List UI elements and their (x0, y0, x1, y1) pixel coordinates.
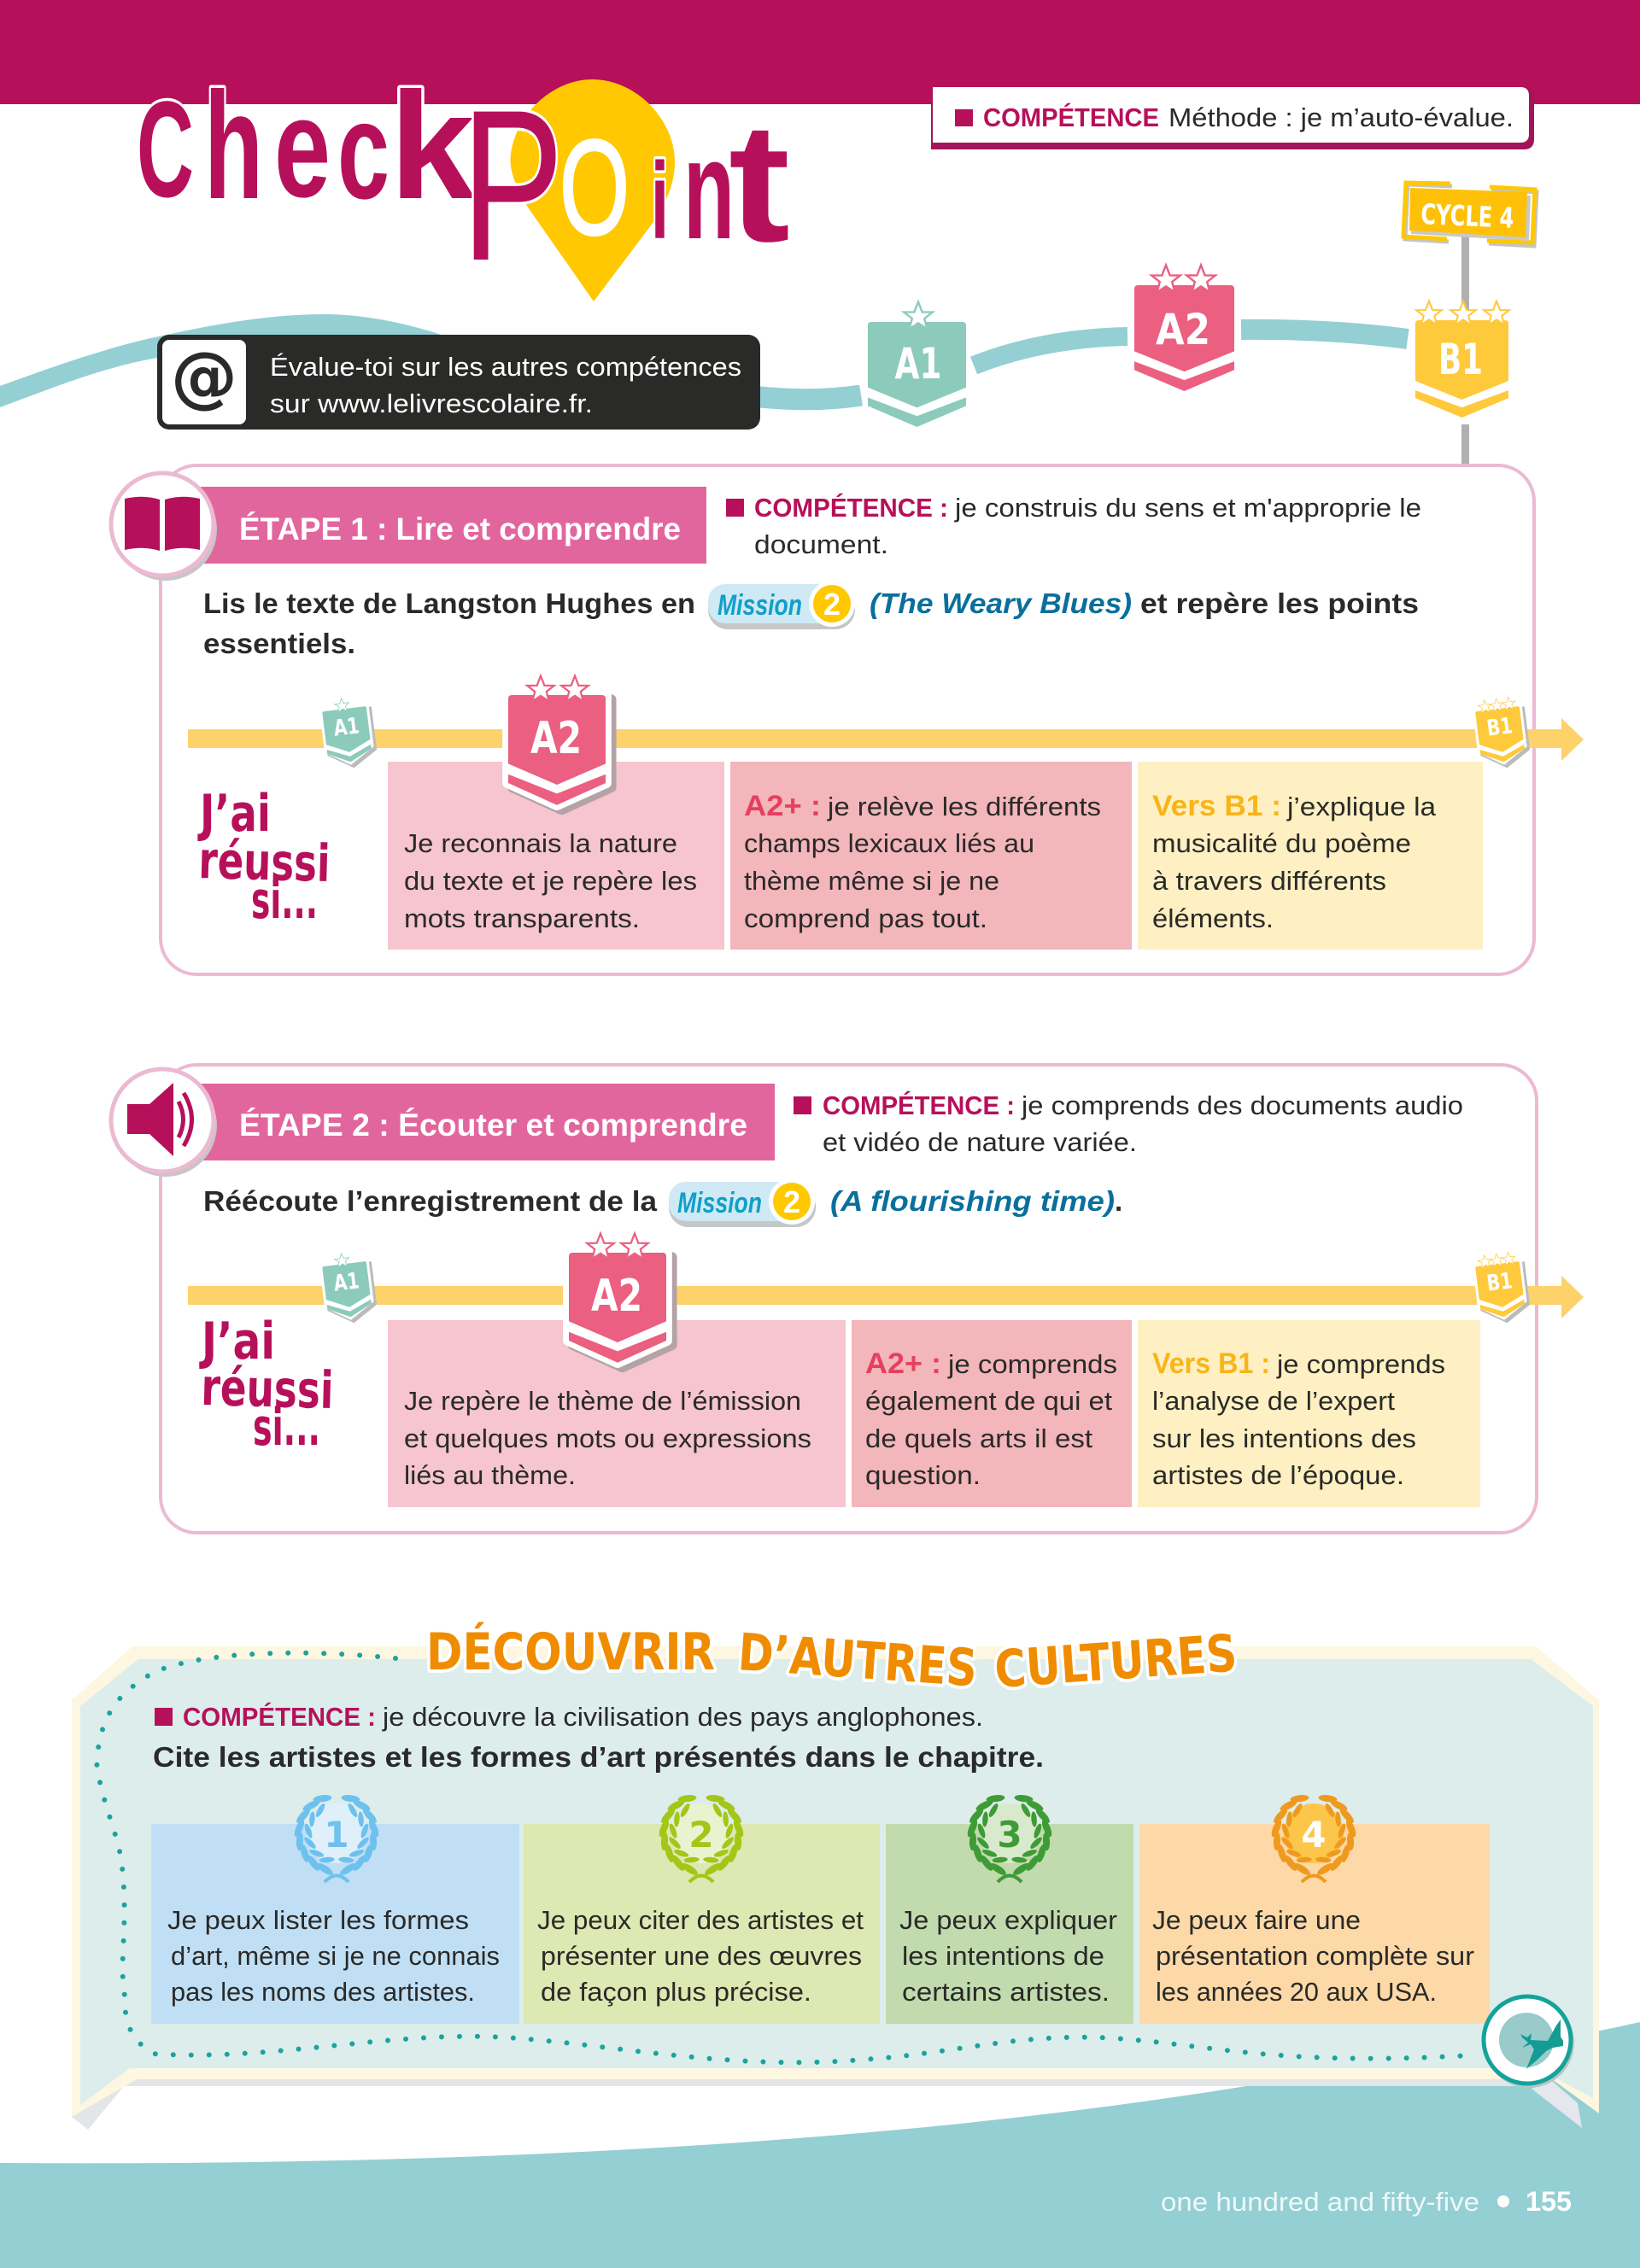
badge: small A1 (319, 1250, 378, 1326)
level box 2: présenter une des œuvres (541, 1941, 862, 1971)
box: towards B1: j’explique la (1286, 792, 1437, 821)
j'ai reussi si: si... (253, 1398, 320, 1458)
box: towards B1: à travers différents (1152, 866, 1386, 896)
heading: etape 1: ÉTAPE 1 : Lire et comprendre (239, 511, 681, 547)
title: decouvrir d'autres cultures (426, 1621, 1239, 1700)
instruction (203, 581, 1419, 659)
checkpoint logo (137, 61, 790, 306)
logo letters (137, 61, 790, 306)
badge: small B1: B1 (1485, 1268, 1514, 1297)
icon: wreath 4: 4 (1301, 1814, 1327, 1856)
instruction: Lis le texte de Langston Hughes en (203, 587, 695, 619)
icon: wreath 3: 3 (997, 1814, 1022, 1856)
callout: evaluate online: sur www.lelivrescolaire.fr. (270, 389, 593, 418)
competence box: methode (931, 87, 1534, 149)
level box 4: les années 20 aux USA. (1156, 1977, 1437, 2007)
logo letters: O (559, 113, 630, 263)
box: level A2 plus: question. (865, 1460, 981, 1490)
title: decouvrir d'autres cultures: DÉCOUVRIR (426, 1621, 715, 1682)
heading: etape 2 (201, 1084, 775, 1160)
box: towards B1: je comprends (1276, 1349, 1445, 1379)
icon: wreath 1 (292, 1794, 381, 1882)
level box 1 (151, 1824, 519, 2024)
badge: B1 level: B1 (1438, 335, 1483, 384)
icon: yellow map pin (511, 79, 675, 301)
logo letters: i (651, 140, 669, 261)
box: towards B1: Vers B1 : (1152, 790, 1281, 822)
box: level A2 plus: thème même si je ne (744, 866, 999, 896)
box: level A2 (388, 1320, 846, 1507)
badge: small A1: A1 (332, 713, 360, 742)
box: level A2: Je repère le thème de l’émission (404, 1386, 801, 1416)
badge: big A2: A2 (530, 713, 582, 764)
icon: at sign: @ (171, 339, 237, 416)
icon: wreath 1: 1 (324, 1814, 349, 1856)
badge: A2 level (1134, 265, 1234, 391)
icon: wreath 2: 2 (688, 1814, 714, 1856)
competence box: methode: Méthode : je m’auto-évalue. (1168, 102, 1514, 132)
level box 3: Je peux expliquer (899, 1905, 1117, 1935)
instruction (203, 1178, 1122, 1227)
instruction: (The Weary Blues) (870, 587, 1132, 619)
level box 2: de façon plus précise. (541, 1977, 811, 2007)
footer page number: 155 (1526, 2186, 1572, 2217)
box: towards B1: éléments. (1152, 903, 1274, 933)
j'ai reussi si: réussi (198, 831, 331, 894)
competence text: je découvre la civilisation des pays anglophones. (382, 1702, 983, 1732)
j'ai reussi si: J’ai (197, 784, 271, 844)
box: level A2: mots transparents. (404, 903, 640, 933)
badge: small B1: B1 (1485, 713, 1514, 742)
competence text (726, 493, 1421, 559)
box: level A2: et quelques mots ou expressions (404, 1423, 811, 1453)
box: level A2 plus: je comprends (947, 1349, 1117, 1379)
level box 4: présentation complète sur (1156, 1941, 1474, 1971)
mission 2 tag (669, 1178, 816, 1227)
badge: big A2: A2 (591, 1271, 642, 1322)
level box 3 (886, 1824, 1133, 2024)
j'ai reussi si: si... (251, 871, 318, 931)
level box 4 (1139, 1824, 1490, 2024)
badge: A1 level (868, 301, 966, 427)
logo letters: k (390, 61, 476, 231)
box: level A2 plus: champs lexicaux liés au (744, 828, 1034, 858)
panel: etape 1 (111, 465, 1584, 974)
pole (1461, 231, 1469, 465)
instruction: Réécoute l’enregistrement de la (203, 1185, 658, 1217)
progress arrow (188, 718, 1584, 761)
box: level A2 plus (852, 1320, 1132, 1507)
competence box: methode: COMPÉTENCE (983, 102, 1159, 132)
box: level A2 plus: de quels arts il est (865, 1423, 1092, 1453)
j'ai reussi si (199, 1312, 334, 1458)
box: level A2 plus: comprend pas tout. (744, 903, 987, 933)
callout: evaluate online: Évalue-toi sur les autres compétences (270, 352, 741, 382)
box: level A2 (388, 762, 724, 950)
competence text: COMPÉTENCE : (754, 493, 948, 523)
icon: book (111, 473, 217, 581)
callout: evaluate online (157, 335, 760, 430)
instruction: et repère les points (1140, 587, 1419, 619)
box: level A2 plus: également de qui et (865, 1386, 1112, 1416)
badge: B1 level (1415, 301, 1509, 418)
icon: wreath 3 (965, 1794, 1054, 1882)
level box 1: Je peux lister les formes (167, 1905, 469, 1935)
box: level A2 plus: A2+ : (744, 790, 821, 822)
badge: small B1 (1472, 695, 1532, 771)
logo letters: t (729, 88, 790, 277)
logo letters: e (274, 69, 331, 227)
bottom teal wave (0, 2022, 1640, 2268)
box: towards B1 (1138, 1320, 1480, 1507)
badge: A1 level: A1 (895, 339, 941, 389)
teal wave path (0, 314, 1408, 427)
progress arrow (188, 1276, 1584, 1318)
badge: big A2 (569, 1233, 671, 1367)
badge: small A1: A1 (332, 1268, 360, 1297)
competence text: COMPÉTENCE : (823, 1090, 1015, 1120)
competence text (794, 1090, 1463, 1157)
icon: speaker (111, 1069, 217, 1177)
box: towards B1: artistes de l’époque. (1152, 1460, 1404, 1490)
icon: plane (1484, 1996, 1574, 2088)
heading: etape 1 (201, 487, 706, 564)
badge: big A2 (508, 676, 611, 810)
box: level A2 plus: je relève les différents (827, 792, 1101, 821)
badge: small B1 (1472, 1250, 1532, 1326)
cycle 4 sign: CYCLE 4 (1420, 197, 1514, 235)
competence text: et vidéo de nature variée. (823, 1127, 1137, 1157)
logo letters: h (204, 61, 263, 231)
instruction: (A flourishing time) (830, 1185, 1115, 1217)
heading: etape 2: ÉTAPE 2 : Écouter et comprendre (239, 1108, 747, 1143)
logo letters: n (683, 111, 735, 269)
level box 1: d’art, même si je ne connais (171, 1941, 500, 1971)
instruction: Cite les artistes et les formes d’art présentés dans le chapitre. (153, 1741, 1044, 1773)
mission 2 tag: Mission (677, 1187, 762, 1219)
box: level A2 plus (730, 762, 1132, 950)
level box 1: pas les noms des artistes. (171, 1977, 475, 2007)
box: level A2 plus: A2+ : (865, 1347, 941, 1380)
dotted path (97, 1653, 1469, 2062)
logo letters: P (461, 66, 564, 306)
badge: A2 level: A2 (1156, 305, 1210, 354)
j'ai reussi si: J’ai (199, 1312, 275, 1371)
panel: decouvrir d'autres cultures (72, 1621, 1599, 2130)
box: level A2: Je reconnais la nature (404, 828, 677, 858)
instruction: essentiels. (203, 628, 355, 659)
competence text (155, 1702, 983, 1732)
cycle 4 sign (1403, 183, 1537, 246)
j'ai reussi si: réussi (201, 1358, 334, 1421)
box: towards B1: sur les intentions des (1152, 1423, 1416, 1453)
logo letters: C (137, 73, 194, 225)
logo letters: c (337, 73, 390, 228)
level box 3: certains artistes. (902, 1977, 1110, 2007)
box: towards B1 (1138, 762, 1483, 950)
box: towards B1: Vers B1 : (1152, 1347, 1270, 1380)
box: level A2: du texte et je repère les (404, 866, 697, 896)
competence text: je construis du sens et m'approprie le (954, 493, 1421, 523)
level box 4: Je peux faire une (1152, 1905, 1361, 1935)
level box 3: les intentions de (902, 1941, 1104, 1971)
box: towards B1: musicalité du poème (1152, 828, 1411, 858)
mission 2 tag: Mission (718, 589, 802, 622)
level box 2 (524, 1824, 880, 2024)
competence text: je comprends des documents audio (1021, 1090, 1463, 1120)
panel: etape 2 (111, 1065, 1584, 1533)
banner ribbon (72, 1646, 1599, 2130)
level box 2: Je peux citer des artistes et (537, 1905, 864, 1935)
instruction: . (1115, 1185, 1122, 1217)
title: decouvrir d'autres cultures: D’AUTRES (736, 1622, 979, 1698)
mission 2 tag: 2 (783, 1184, 800, 1219)
badge: small A1 (319, 695, 378, 771)
box: towards B1: l’analyse de l’expert (1152, 1386, 1395, 1416)
icon: wreath 4 (1269, 1794, 1358, 1882)
mission 2 tag: 2 (823, 587, 840, 622)
box: level A2: liés au thème. (404, 1460, 576, 1490)
competence text: COMPÉTENCE : (183, 1702, 376, 1732)
top band (0, 0, 1640, 104)
mission 2 tag (708, 581, 855, 629)
icon: wreath 2 (657, 1794, 746, 1882)
title: decouvrir d'autres cultures: CULTURES (993, 1623, 1239, 1700)
j'ai reussi si (197, 784, 331, 931)
footer page number: one hundred and fifty-five (1161, 2187, 1479, 2217)
competence text: document. (754, 529, 888, 559)
